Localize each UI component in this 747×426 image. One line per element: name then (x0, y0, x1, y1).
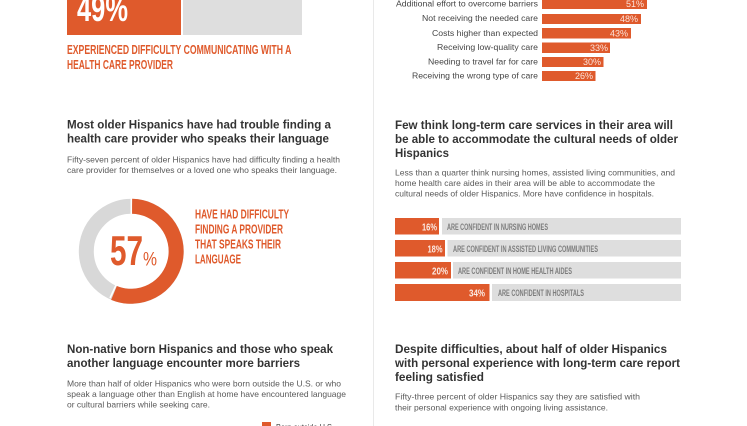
donut chart: 57 percent: % (143, 250, 157, 270)
bar: additional effort (396, 0, 647, 9)
heading: despite difficulties: feeling satisfied (395, 371, 484, 384)
bar: costs higher: Costs higher than expected (432, 28, 538, 38)
text block: more than half: or cultural barriers while seeking care. (67, 400, 210, 410)
text block: less than a quarter: Less than a quarter think nursing homes, assisted living communities, and (395, 168, 675, 178)
stat caption: HEALTH CARE PROVIDER (67, 57, 173, 72)
donut chart: 57 percent (86, 197, 176, 298)
donut caption: FINDING A PROVIDER (195, 222, 283, 236)
heading: non-native born: another language encounter more barriers (67, 357, 300, 370)
stat caption: EXPERIENCED DIFFICULTY COMMUNICATING WITH A (67, 42, 292, 57)
bar: costs higher (432, 28, 631, 38)
text block: less than a quarter: cultural needs of older Hispanics. More have confidence in hospitals. (395, 188, 654, 198)
bar: nursing homes: ARE CONFIDENT IN NURSING HOMES (447, 222, 548, 232)
stat bar: 49 percent (67, 0, 302, 35)
donut caption: THAT SPEAKS THEIR (195, 236, 281, 252)
bar: home health aides (395, 262, 681, 278)
heading: few think long-term care: Few think long-term care services in their area will (395, 119, 673, 132)
bar: low-quality care: 33% (590, 43, 608, 53)
text block: fifty-three percent: their personal experience with ongoing living assistance. (395, 402, 608, 412)
bar: hospitals (395, 284, 681, 301)
bar chart: confidence in care settings (395, 218, 681, 301)
bar: nursing homes (395, 218, 681, 234)
bar: not receiving needed care: 48% (620, 14, 638, 24)
heading: few think long-term care: be able to accommodate the cultural needs of older (395, 133, 678, 146)
heading: trouble finding a provider: health care provider who speaks their language (67, 132, 330, 146)
text block: more than half: speak a language other than English at home have encountered language (67, 389, 346, 399)
bar: not receiving needed care (422, 13, 641, 24)
bar: low-quality care (437, 42, 610, 53)
bar: home health aides: 20% (432, 266, 448, 278)
bar: wrong type of care (412, 70, 596, 81)
donut caption: LANGUAGE (195, 252, 241, 266)
bar: assisted living: ARE CONFIDENT IN ASSISTED LIVING COMMUNITIES (453, 244, 598, 254)
bar: hospitals: ARE CONFIDENT IN HOSPITALS (498, 288, 584, 298)
bar: travel far: 30% (583, 57, 601, 67)
bar: wrong type of care: 26% (575, 71, 593, 81)
text block: more than half: More than half of older Hispanics who were born outside the U.S. or who (67, 378, 341, 388)
heading: despite difficulties: with personal experience with long-term care report (394, 357, 680, 370)
bar: costs higher: 43% (610, 28, 628, 38)
bar: wrong type of care: Receiving the wrong type of care (412, 70, 538, 80)
text block: fifty-seven percent: Fifty-seven percent of older Hispanics have had difficulty finding a health (67, 154, 340, 164)
bar: assisted living: 18% (428, 244, 443, 256)
bar: travel far (428, 56, 604, 67)
heading: despite difficulties: Despite difficulties, about half of older Hispanics (395, 343, 667, 356)
bar: travel far: Needing to travel far for care (428, 56, 538, 66)
text block: fifty-seven percent: care provider for themselves or a loved one who speaks their language. (67, 165, 337, 175)
heading: non-native born: Non-native born Hispanics and those who speak (67, 343, 334, 356)
heading: trouble finding a provider: Most older Hispanics have had trouble finding a (67, 118, 332, 132)
text block: less than a quarter: home health care aides in their area will be able to accommodate the (395, 178, 655, 188)
panel: difficulty communicating (67, 0, 302, 72)
text block: fifty-three percent: Fifty-three percent of older Hispanics say they are satisfied with (395, 392, 640, 402)
bar: nursing homes: 16% (422, 222, 437, 234)
bar: low-quality care: Receiving low-quality care (437, 42, 538, 52)
donut caption: HAVE HAD DIFFICULTY (195, 206, 289, 222)
bar: assisted living (395, 240, 681, 256)
bar: not receiving needed care: Not receiving the needed care (422, 13, 538, 23)
bar: home health aides: ARE CONFIDENT IN HOME HEALTH AIDES (458, 266, 572, 276)
bar chart: barriers encountered (396, 0, 647, 81)
heading: few think long-term care: Hispanics (395, 147, 449, 160)
donut chart: 57 percent: 57 (110, 227, 143, 274)
bar: hospitals: 34% (469, 288, 485, 300)
